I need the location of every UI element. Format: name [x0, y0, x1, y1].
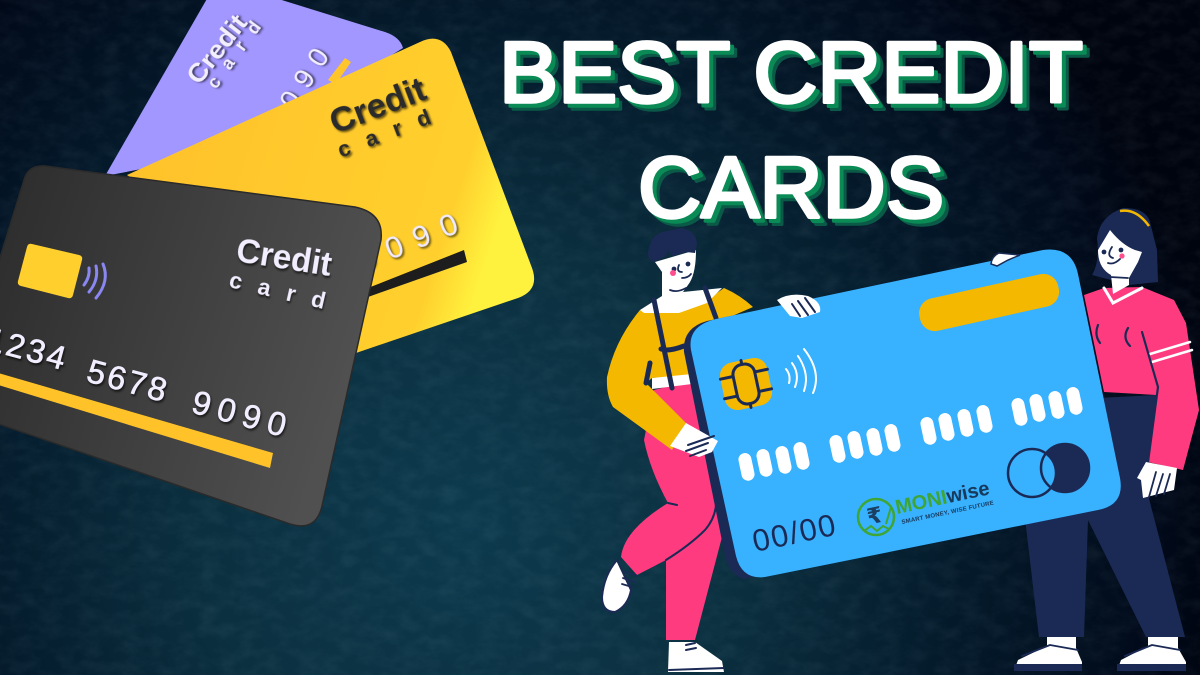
woman sweater details [1096, 288, 1192, 462]
woman neck and face [1098, 230, 1142, 294]
man hair [648, 228, 697, 262]
woman hand gripping card top [991, 253, 1020, 266]
title: CARDS [638, 140, 944, 236]
title: CARDS [645, 147, 951, 243]
contactless waves [786, 349, 816, 393]
MONIwise logo: ₹ [865, 502, 885, 530]
title: CARDS [642, 144, 948, 240]
contactless waves on black card [84, 264, 105, 298]
man facial features [670, 262, 691, 291]
black card label: Credit [234, 231, 335, 284]
card network circles [1008, 444, 1089, 497]
black card number: 5678 [83, 352, 171, 409]
black card number: 9090 [188, 383, 290, 444]
man waistband [652, 374, 692, 389]
purple credit card: Credit [180, 8, 253, 90]
black credit card [0, 166, 381, 526]
woman hand at side [1137, 462, 1177, 498]
black card stripe [0, 372, 273, 468]
man front shoe [668, 642, 724, 672]
card chip [718, 356, 774, 412]
woman holding the card [1014, 208, 1199, 671]
yellow credit card: Credit [324, 70, 431, 141]
purple credit card [105, 0, 403, 176]
yellow credit card: c a r d [334, 104, 434, 163]
expiry date: 00/00 [749, 507, 839, 559]
man hand gripping card edge [670, 423, 718, 457]
MONIwise logo [858, 477, 994, 535]
title: BEST CREDIT [499, 25, 1083, 121]
man raised shoe [602, 560, 636, 612]
title [499, 25, 1090, 243]
card number pills [737, 386, 1084, 482]
yellow credit card [127, 39, 534, 353]
yellow credit card: 9090 [353, 206, 463, 277]
title: BEST CREDIT [506, 32, 1090, 128]
purple credit card: c a r d [203, 17, 265, 92]
MONIwise logo: MONIwise [893, 477, 992, 519]
signature strip [916, 271, 1062, 334]
man suspenders [646, 288, 716, 388]
man sweater [607, 288, 753, 450]
black card sublabel: c a r d [227, 267, 328, 314]
woman facial features [1102, 247, 1128, 278]
man shirt and collar [640, 288, 722, 313]
black card number [0, 320, 290, 444]
MONIwise logo: SMART MONEY, WISE FUTURE [901, 501, 994, 526]
purple credit card: 9090 [259, 42, 335, 136]
man holding the card [602, 228, 753, 672]
title: BEST CREDIT [503, 29, 1087, 125]
man neck and face [655, 250, 696, 297]
large blue credit card [684, 250, 1121, 579]
woman left shoe [1014, 637, 1082, 671]
man trousers [621, 378, 730, 640]
woman trousers [1024, 395, 1185, 637]
chip on black card [18, 244, 82, 298]
woman sweater [1084, 287, 1199, 470]
woman right shoe [1117, 637, 1186, 671]
woman hair bun and hair [1092, 208, 1158, 285]
woman hair tie [1120, 211, 1149, 226]
man hand gripping card top [777, 295, 820, 318]
